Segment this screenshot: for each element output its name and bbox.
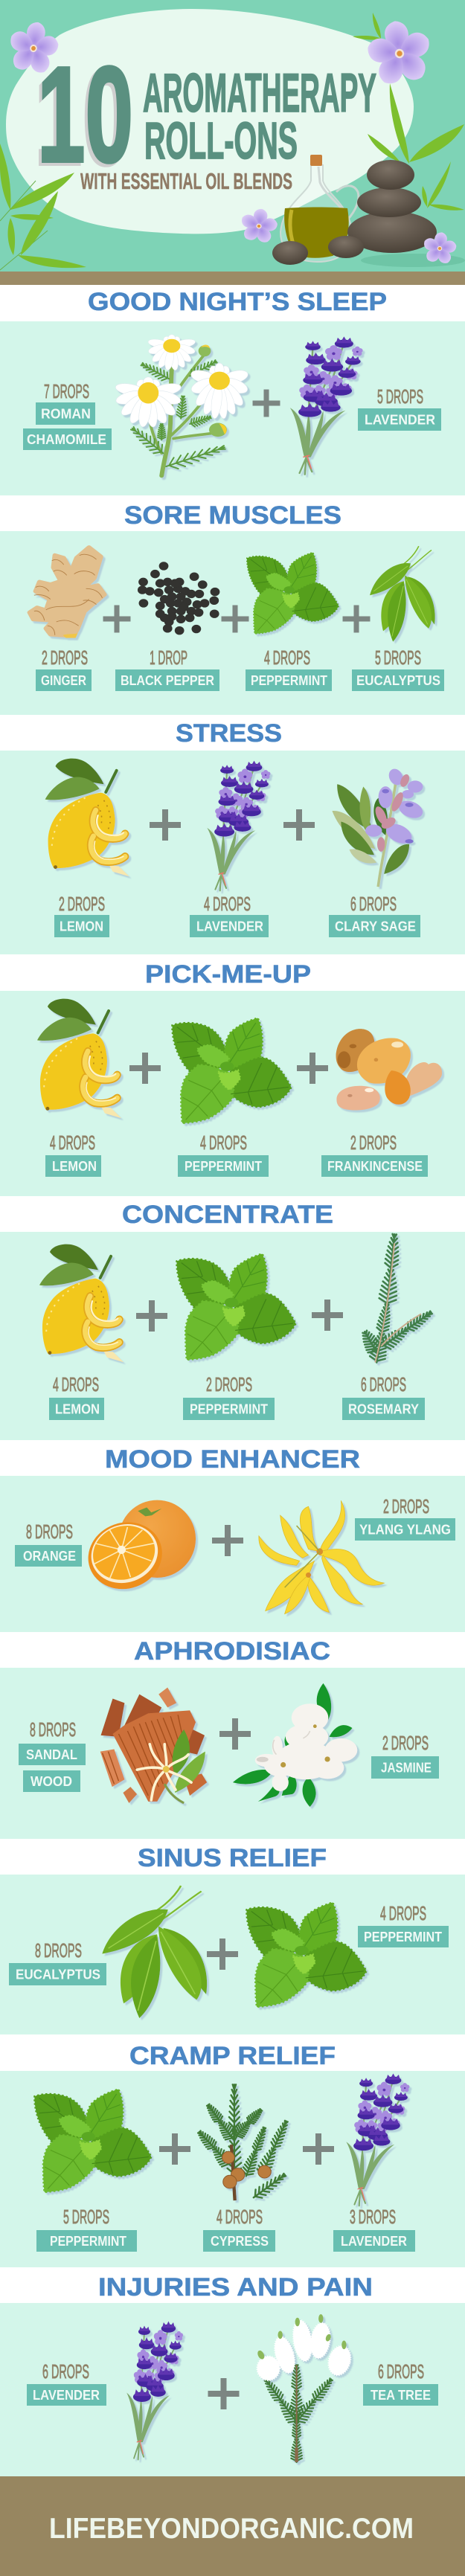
- heading: PICK-ME-UP: [145, 960, 311, 989]
- plus sign: [208, 2378, 240, 2409]
- panel background: [0, 321, 465, 495]
- subtitle: WITH ESSENTIAL OIL BLENDS: [80, 168, 292, 194]
- label: lavender: 6 DROPS: [42, 2360, 89, 2383]
- icon: eucalyptus: [370, 546, 435, 642]
- label: peppermint: 2 DROPS: [206, 1373, 252, 1395]
- label: lavender: LAVENDER: [196, 919, 263, 934]
- label: clary sage: 6 DROPS: [350, 893, 397, 915]
- plus sign: [207, 1939, 238, 1970]
- panel background: [0, 1476, 465, 1632]
- label: lavender: [358, 385, 441, 431]
- label: jasmine: JASMINE: [381, 1760, 432, 1775]
- heading: SINUS RELIEF: [138, 1844, 327, 1872]
- footer: [0, 2476, 465, 2576]
- icon: black pepper: [138, 562, 219, 635]
- label: lemon: [45, 1131, 101, 1177]
- label: clary sage: [329, 893, 420, 937]
- section: pick-me-up: [0, 960, 465, 1196]
- bamboo leaves left: [0, 144, 86, 270]
- label: peppermint: 4 DROPS: [200, 1131, 247, 1154]
- label: frankincense: 2 DROPS: [350, 1131, 397, 1154]
- number 10: 10: [37, 38, 133, 190]
- label: lemon: 4 DROPS: [53, 1373, 99, 1395]
- stacked stones: [272, 160, 437, 265]
- label: lavender: LAVENDER: [33, 2388, 100, 2403]
- section: good night's sleep: [0, 288, 465, 495]
- plus sign: [297, 1053, 328, 1084]
- label: lavender: 5 DROPS: [377, 385, 423, 408]
- label: ginger: GINGER: [41, 673, 86, 688]
- icon: lemon: [39, 1244, 124, 1362]
- section: sore muscles: [0, 501, 465, 715]
- heading: MOOD ENHANCER: [105, 1445, 360, 1474]
- label: roman chamomile: CHAMOMILE: [27, 432, 106, 447]
- label: jasmine: [371, 1732, 439, 1779]
- icon: peppermint: [177, 1254, 295, 1360]
- label: eucalyptus: [9, 1939, 106, 1985]
- label: sandalwood: [19, 1718, 86, 1792]
- icon: orange: [79, 1500, 196, 1599]
- label: peppermint: PEPPERMINT: [50, 2234, 126, 2249]
- label: frankincense: [321, 1131, 428, 1177]
- icon: tea tree: [256, 2314, 354, 2462]
- heading: CONCENTRATE: [122, 1201, 333, 1229]
- icon: jasmine: [233, 1683, 357, 1807]
- icon: ginger: [30, 547, 104, 638]
- panel background: [0, 1232, 465, 1440]
- icon: rosemary: [358, 1233, 435, 1364]
- label: tea tree: TEA TREE: [371, 2388, 431, 2403]
- label: lavender: [190, 893, 269, 937]
- icon: sandalwood: [100, 1687, 207, 1803]
- number 10: [34, 38, 133, 193]
- label: frankincense: FRANKINCENSE: [327, 1159, 423, 1174]
- plus sign: [136, 1300, 167, 1332]
- white cloud backdrop: [6, 9, 414, 234]
- icon: peppermint: [246, 1903, 366, 2007]
- label: eucalyptus: [352, 646, 444, 691]
- plus sign: [283, 809, 315, 841]
- panel background: [0, 531, 465, 715]
- label: eucalyptus: EUCALYPTUS: [16, 1967, 100, 1982]
- icon: lavender: [207, 761, 270, 890]
- plus sign: [312, 1300, 343, 1331]
- section: aphrodisiac: [0, 1637, 465, 1839]
- label: peppermint: [246, 646, 332, 691]
- label: clary sage: CLARY SAGE: [335, 919, 416, 934]
- icon: lemon: [37, 999, 121, 1118]
- label: tea tree: 6 DROPS: [378, 2360, 424, 2383]
- label: black pepper: [115, 646, 219, 691]
- section: mood enhancer: [0, 1445, 465, 1632]
- label: lemon: 2 DROPS: [59, 893, 105, 915]
- label: jasmine: 2 DROPS: [382, 1732, 429, 1754]
- label: sandalwood: WOOD: [31, 1774, 72, 1789]
- icon: lavender: [346, 2073, 409, 2206]
- icon: chamomile: [115, 335, 248, 476]
- label: lemon: 4 DROPS: [50, 1131, 95, 1154]
- label: lavender: LAVENDER: [341, 2234, 407, 2249]
- label: roman chamomile: [23, 380, 112, 450]
- label: cypress: 4 DROPS: [217, 2206, 263, 2228]
- heading: INJURIES AND PAIN: [98, 2273, 373, 2302]
- icon: cypress: [194, 2084, 292, 2202]
- label: peppermint: 4 DROPS: [264, 646, 310, 669]
- label: peppermint: 5 DROPS: [63, 2206, 109, 2228]
- label: lavender: [27, 2360, 106, 2406]
- label: black pepper: 1 DROP: [150, 646, 187, 669]
- header banner: [0, 0, 465, 272]
- label: lemon: LEMON: [55, 1401, 100, 1416]
- heading: STRESS: [176, 719, 282, 748]
- label: ylang ylang: [355, 1495, 455, 1541]
- divider band: [0, 272, 465, 285]
- label: peppermint: [178, 1131, 269, 1177]
- plus sign: [303, 2133, 334, 2165]
- label: black pepper: BLACK PEPPER: [121, 673, 214, 688]
- icon: frankincense: [336, 1029, 442, 1111]
- title: ROLL-ONS: [144, 112, 298, 170]
- label: rosemary: [342, 1373, 425, 1420]
- label: peppermint: [183, 1373, 275, 1420]
- label: peppermint: PEPPERMINT: [251, 673, 327, 688]
- label: eucalyptus: 8 DROPS: [35, 1939, 82, 1962]
- label: sandalwood: 8 DROPS: [30, 1718, 76, 1741]
- section: concentrate: [0, 1201, 465, 1440]
- bamboo leaves right: [353, 13, 464, 211]
- panel background: [0, 751, 465, 954]
- panel background: [0, 991, 465, 1196]
- number 10: 10: [34, 41, 130, 193]
- label: orange: ORANGE: [23, 1549, 76, 1564]
- label: tea tree: [363, 2360, 438, 2406]
- plus sign: [219, 1718, 251, 1750]
- oil bottle: [280, 155, 359, 262]
- heading: SORE MUSCLES: [124, 501, 341, 530]
- label: lavender: 4 DROPS: [204, 893, 251, 915]
- icon: lavender: [290, 336, 363, 475]
- label: lemon: LEMON: [52, 1159, 97, 1174]
- label: peppermint: [36, 2206, 137, 2252]
- icon: lavender: [126, 2322, 183, 2459]
- label: lemon: LEMON: [60, 919, 103, 934]
- label: cypress: [203, 2206, 275, 2252]
- panel background: [0, 1668, 465, 1839]
- icon: peppermint: [247, 553, 339, 634]
- flowers: [2, 16, 438, 247]
- label: lemon: [54, 893, 109, 937]
- label: eucalyptus: EUCALYPTUS: [356, 673, 440, 688]
- section: cramp relief: [0, 2042, 465, 2267]
- label: orange: [15, 1520, 82, 1567]
- label: ylang ylang: YLANG YLANG: [359, 1522, 451, 1537]
- plus sign: [159, 2133, 190, 2165]
- footer website: LIFEBEYONDORGANIC.COM: [49, 2513, 414, 2545]
- section: sinus relief: [0, 1844, 465, 2034]
- label: roman chamomile: ROMAN: [41, 406, 91, 421]
- label: peppermint: [358, 1902, 449, 1947]
- label: orange: 8 DROPS: [26, 1520, 73, 1543]
- label: lavender: 3 DROPS: [350, 2206, 396, 2228]
- plus sign: [150, 809, 181, 841]
- icon: peppermint: [173, 1018, 291, 1123]
- icon: eucalyptus: [102, 1886, 207, 2018]
- plus sign: [129, 1053, 161, 1084]
- icon: ylang ylang: [259, 1500, 384, 1614]
- title: [143, 63, 376, 170]
- label: rosemary: 6 DROPS: [361, 1373, 406, 1395]
- icon: peppermint: [34, 2090, 151, 2192]
- plus sign: [343, 606, 370, 632]
- label: peppermint: PEPPERMINT: [185, 1159, 262, 1174]
- plus sign: [222, 606, 248, 632]
- heading: GOOD NIGHT’S SLEEP: [88, 288, 387, 316]
- label: roman chamomile: 7 DROPS: [44, 380, 89, 402]
- panel background: [0, 2303, 465, 2476]
- icon: lemon: [45, 759, 129, 876]
- plus sign: [253, 390, 280, 417]
- panel background: [0, 2071, 465, 2267]
- section: stress: [0, 719, 465, 954]
- label: peppermint: 4 DROPS: [380, 1902, 426, 1924]
- label: lemon: [49, 1373, 104, 1420]
- label: ginger: [36, 646, 92, 691]
- label: peppermint: PEPPERMINT: [190, 1401, 268, 1416]
- heading: APHRODISIAC: [134, 1637, 330, 1666]
- label: peppermint: PEPPERMINT: [364, 1930, 442, 1944]
- label: lavender: [333, 2206, 415, 2252]
- label: eucalyptus: 5 DROPS: [375, 646, 421, 669]
- plus sign: [212, 1525, 243, 1556]
- plus sign: [103, 606, 130, 632]
- flower bottom right: [420, 230, 460, 268]
- label: ginger: 2 DROPS: [42, 646, 88, 669]
- icon: clary sage: [332, 766, 425, 887]
- label: sandalwood: SANDAL: [26, 1747, 77, 1762]
- heading: CRAMP RELIEF: [129, 2042, 336, 2070]
- label: rosemary: ROSEMARY: [348, 1401, 419, 1416]
- section: injuries and pain: [0, 2273, 465, 2476]
- label: cypress: CYPRESS: [211, 2234, 269, 2249]
- panel background: [0, 1875, 465, 2034]
- label: lavender: LAVENDER: [365, 412, 435, 427]
